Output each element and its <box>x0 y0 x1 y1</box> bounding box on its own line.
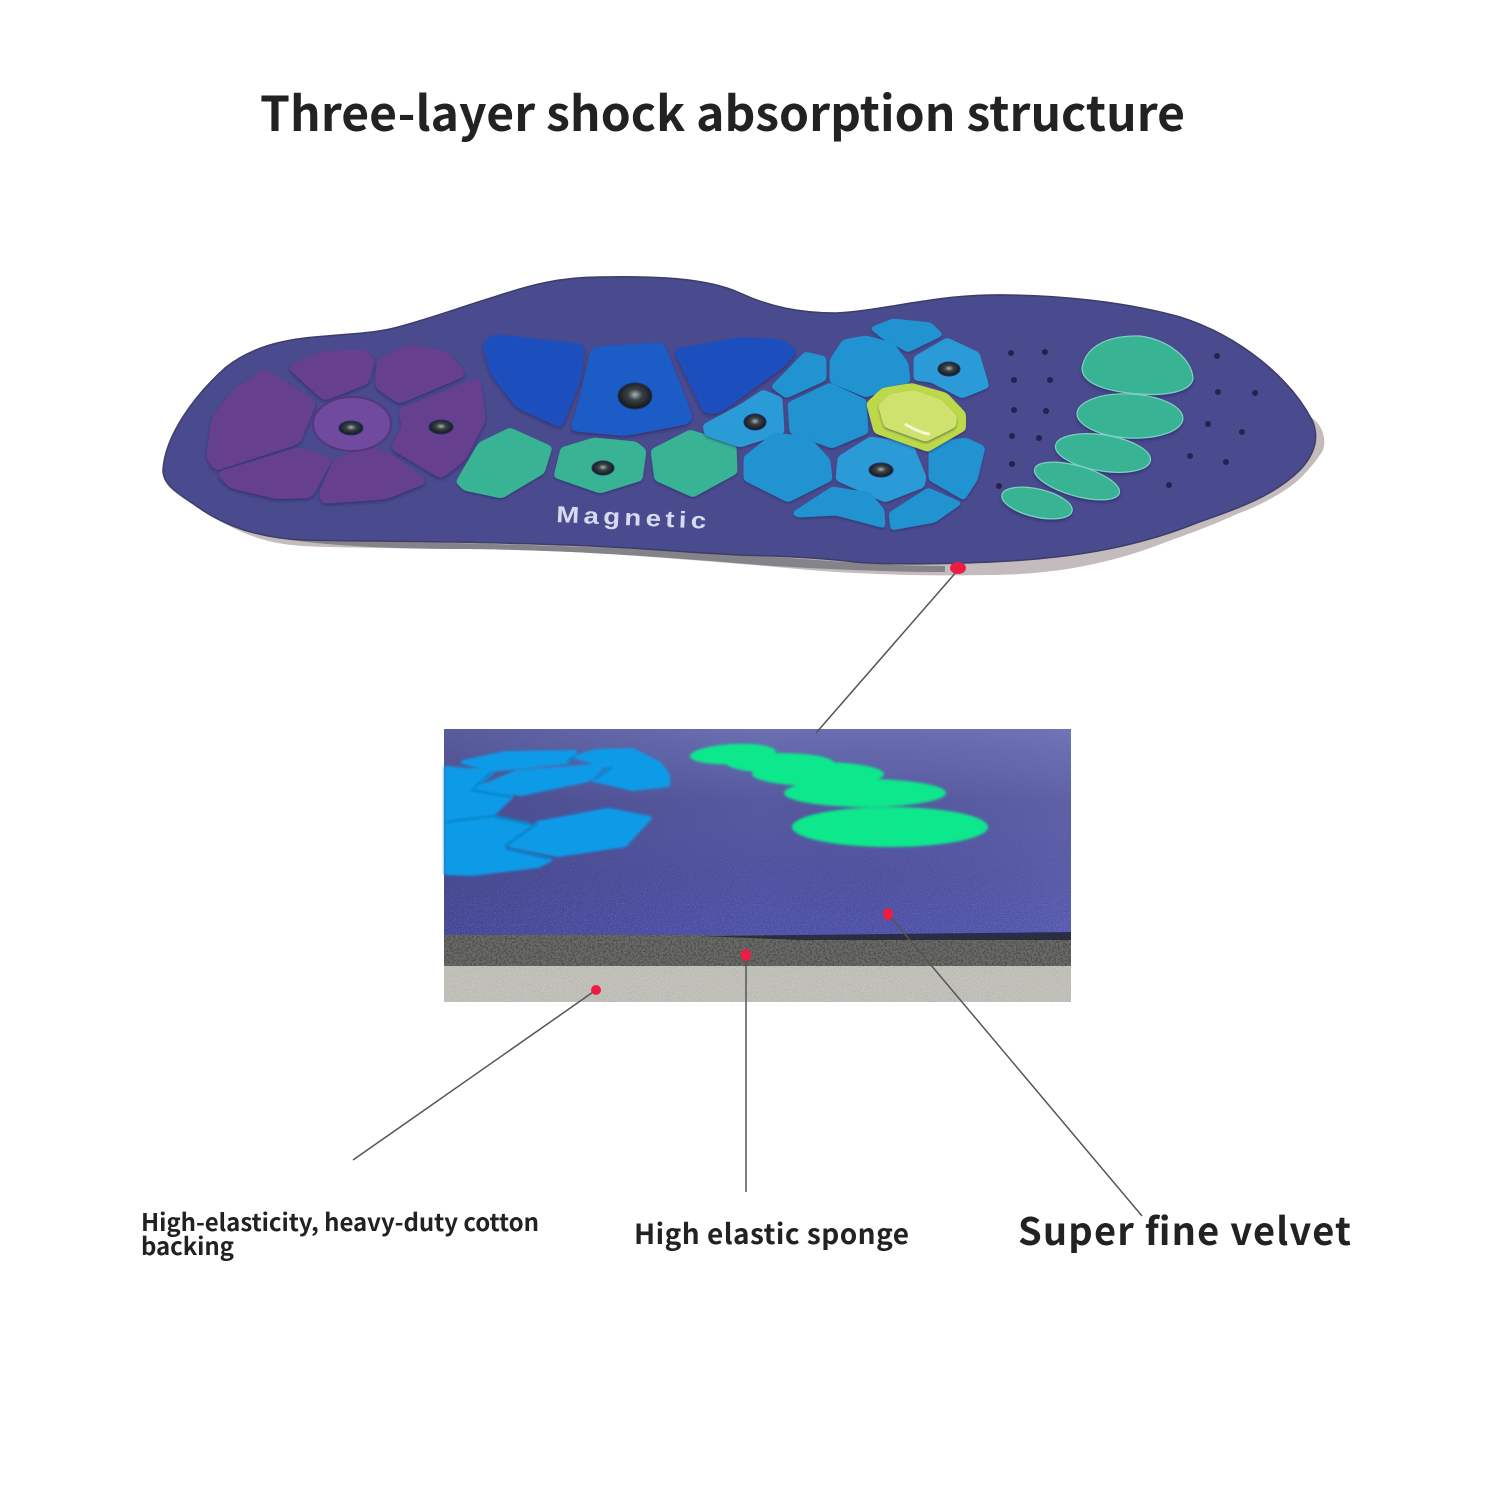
blue pads <box>446 750 668 874</box>
insole sole layer <box>215 418 1324 575</box>
toe pads: teal <box>999 336 1193 525</box>
cross-section photo <box>444 729 1071 1002</box>
ventilation holes <box>996 349 1258 489</box>
forefoot pads: light blue <box>703 319 989 530</box>
magnets <box>339 362 960 477</box>
heel pad: centre ring <box>313 397 391 451</box>
sponge layer <box>444 932 1071 966</box>
red marker dots <box>591 562 966 995</box>
leader lines <box>353 570 1142 1216</box>
backing layer <box>444 966 1071 1002</box>
heel pad: purple petals <box>207 345 485 503</box>
insole sole: darker tread at heel side <box>250 532 945 572</box>
label: velvet: Super fine velvet <box>1018 1201 1351 1256</box>
label: cotton backing: High-elasticity, heavy-duty cotton <box>141 1203 539 1238</box>
arch pads: teal <box>456 428 737 498</box>
fabric layer <box>444 729 1071 936</box>
gel pad: yellow hexagon <box>866 383 966 452</box>
brand text: Magnetic <box>556 502 707 534</box>
arch pads: dark blue <box>483 335 797 435</box>
insole top fabric <box>163 277 1316 564</box>
insole product photo <box>163 277 1324 575</box>
title: Three-layer shock absorption structure <box>260 75 1185 145</box>
green pads <box>690 742 988 847</box>
blue pad seams <box>446 756 612 859</box>
label: cotton backing: backing <box>141 1227 234 1262</box>
label: sponge: High elastic sponge <box>634 1213 909 1253</box>
